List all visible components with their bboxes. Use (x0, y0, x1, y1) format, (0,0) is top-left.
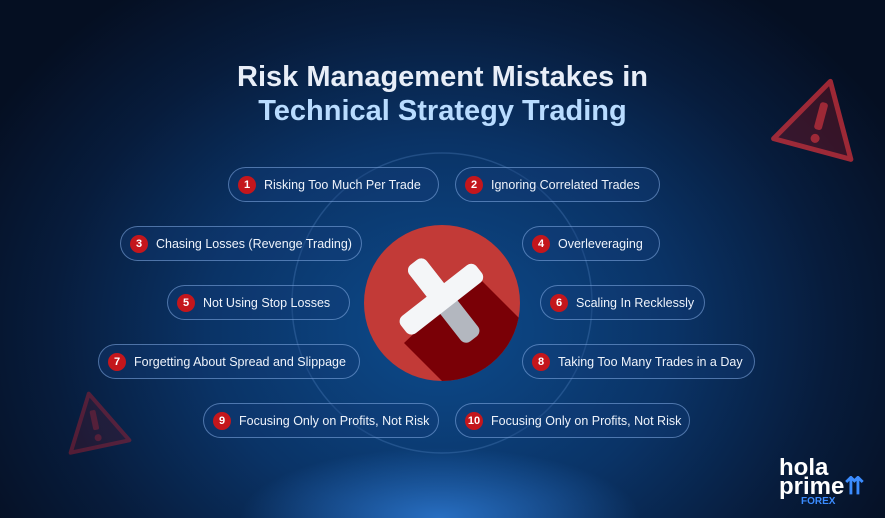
item 1: Risking Too Much Per Trade (264, 178, 421, 192)
item 6: 6 (556, 296, 562, 308)
item 8: 8 (538, 356, 544, 368)
item 5 (167, 285, 350, 320)
icon: red cross circle (364, 225, 520, 381)
item 7: 7 (114, 356, 120, 368)
icon: warning triangle left (68, 392, 132, 455)
item 2: 2 (471, 178, 477, 190)
item 5: 5 (183, 296, 189, 308)
item 1: 1 (244, 178, 250, 190)
item 6: Scaling In Recklessly (576, 296, 694, 310)
item 4 (522, 226, 660, 261)
title: Technical Strategy Trading (258, 95, 627, 127)
logo (779, 458, 864, 507)
item 9: Focusing Only on Profits, Not Risk (239, 414, 429, 428)
item 9: 9 (219, 414, 225, 426)
title: Risk Management Mistakes in (237, 61, 648, 93)
item 3: 3 (136, 238, 142, 250)
item 10: 10 (468, 414, 480, 426)
item 4: Overleveraging (558, 236, 643, 250)
item 7: Forgetting About Spread and Slippage (134, 354, 346, 368)
title (237, 61, 648, 127)
item 2 (455, 167, 660, 202)
icon: warning triangle right (771, 78, 854, 162)
item 4: 4 (538, 238, 544, 250)
item 9 (203, 403, 439, 438)
logo: FOREX (801, 496, 835, 507)
item 10 (455, 403, 690, 438)
item 7 (98, 344, 360, 379)
item 8 (522, 344, 755, 379)
item 3: Chasing Losses (Revenge Trading) (156, 236, 352, 250)
item 5: Not Using Stop Losses (203, 296, 330, 310)
item 8: Taking Too Many Trades in a Day (558, 354, 743, 368)
item 10: Focusing Only on Profits, Not Risk (491, 414, 681, 428)
logo: prime⇈ (779, 473, 864, 500)
item 3 (120, 226, 362, 261)
item 2: Ignoring Correlated Trades (491, 178, 640, 192)
item 6 (540, 285, 705, 320)
item 1 (228, 167, 439, 202)
